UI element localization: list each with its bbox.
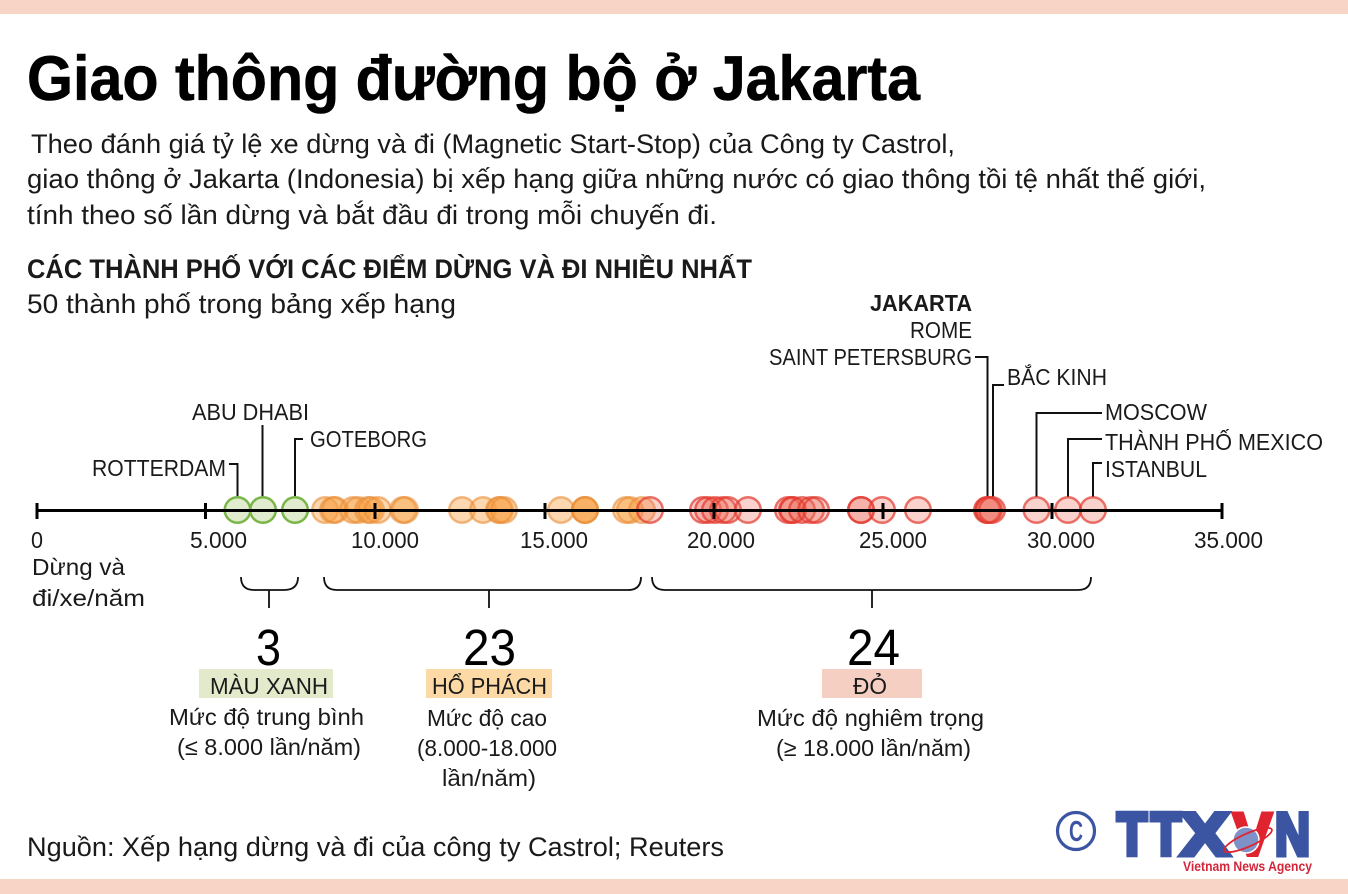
amber dots	[312, 497, 655, 523]
city labels left: ROTTERDAM	[92, 455, 226, 481]
axis labels	[31, 527, 1263, 553]
level description: Mức độ trung bình	[169, 704, 364, 730]
category chip	[199, 669, 333, 698]
axis labels: 10.000	[351, 527, 419, 553]
bracket: amber group	[324, 577, 641, 608]
category name: ĐỎ	[853, 671, 887, 699]
letter X: X	[1181, 801, 1229, 868]
level description	[417, 705, 557, 791]
axis unit label: Dừng và	[32, 554, 125, 580]
bracket: green group	[241, 577, 298, 608]
city labels right	[769, 290, 1323, 482]
orbit	[1222, 823, 1274, 857]
green dots	[225, 497, 308, 523]
letter N: N	[1275, 801, 1310, 868]
letter T: T	[1151, 801, 1181, 868]
city labels left: ABU DHABI	[192, 399, 309, 425]
count: 3	[256, 619, 281, 676]
icon: copyright	[1058, 812, 1094, 850]
city labels left	[92, 399, 427, 481]
number line chart	[37, 357, 1222, 523]
city labels right: JAKARTA	[870, 290, 972, 316]
level description: (8.000-18.000	[417, 735, 557, 761]
group: amber level	[417, 619, 557, 791]
group: green level	[169, 619, 364, 760]
group: red level	[757, 619, 984, 761]
agency name: Vietnam News Agency	[1183, 858, 1312, 874]
level description: Mức độ nghiêm trọng	[757, 705, 984, 731]
source: Nguồn: Xếp hạng dừng và đi của công ty Castrol; Reuters	[27, 832, 724, 862]
axis ticks on top of dots	[37, 503, 1222, 519]
axis labels: 0	[31, 527, 43, 553]
title: Giao thông đường bộ ở Jakarta	[27, 44, 921, 114]
icon: copyright: C	[1069, 816, 1083, 848]
logo: TTXVN	[1117, 801, 1312, 874]
level description	[757, 705, 984, 761]
intro paragraph	[27, 129, 1206, 230]
count: 23	[463, 619, 516, 676]
level description: Mức độ cao	[427, 705, 547, 731]
letter V: V	[1233, 801, 1272, 868]
city labels right: MOSCOW	[1105, 399, 1208, 425]
category name: HỔ PHÁCH	[432, 672, 547, 699]
bracket: red group	[652, 577, 1091, 608]
level description: lần/năm)	[442, 765, 536, 791]
count: 24	[847, 619, 900, 676]
axis labels: 5.000	[190, 527, 247, 553]
level description: (≥ 18.000 lần/năm)	[776, 735, 971, 761]
category chip	[822, 669, 922, 698]
axis unit label: đi/xe/năm	[32, 585, 145, 611]
level description: (≤ 8.000 lần/năm)	[177, 734, 361, 760]
city leader lines	[229, 357, 1102, 497]
city labels right: ROME	[910, 317, 972, 343]
top band	[0, 0, 1348, 14]
axis unit label	[32, 554, 145, 611]
level description	[169, 704, 364, 760]
globe	[1233, 827, 1259, 853]
letter T: T	[1117, 801, 1147, 868]
city labels right: THÀNH PHỐ MEXICO	[1105, 428, 1323, 455]
axis labels: 30.000	[1027, 527, 1095, 553]
axis labels: 20.000	[687, 527, 755, 553]
axis labels: 35.000	[1194, 527, 1263, 553]
chart heading: CÁC THÀNH PHỐ VỚI CÁC ĐIỂM DỪNG VÀ ĐI NHIỀU NHẤT	[27, 252, 752, 284]
axis labels: 25.000	[859, 527, 927, 553]
axis	[37, 503, 1222, 519]
category chip	[426, 669, 552, 698]
intro paragraph: Theo đánh giá tỷ lệ xe dừng và đi (Magnetic Start-Stop) của Công ty Castrol,	[31, 129, 955, 159]
intro paragraph: giao thông ở Jakarta (Indonesia) bị xếp hạng giữa những nước có giao thông tồi tệ nhất thế giới,	[27, 164, 1206, 194]
red dots	[637, 497, 1106, 523]
bottom band	[0, 879, 1348, 894]
category name: MÀU XANH	[210, 673, 328, 699]
city labels right: SAINT PETERSBURG	[769, 344, 972, 370]
axis labels: 15.000	[520, 527, 588, 553]
city labels right: BẮC KINH	[1007, 363, 1107, 390]
intro paragraph: tính theo số lần dừng và bắt đầu đi trong mỗi chuyến đi.	[27, 199, 717, 230]
city labels right: ISTANBUL	[1105, 456, 1207, 482]
chart subheading: 50 thành phố trong bảng xếp hạng	[27, 289, 456, 319]
city labels left: GOTEBORG	[310, 426, 427, 452]
